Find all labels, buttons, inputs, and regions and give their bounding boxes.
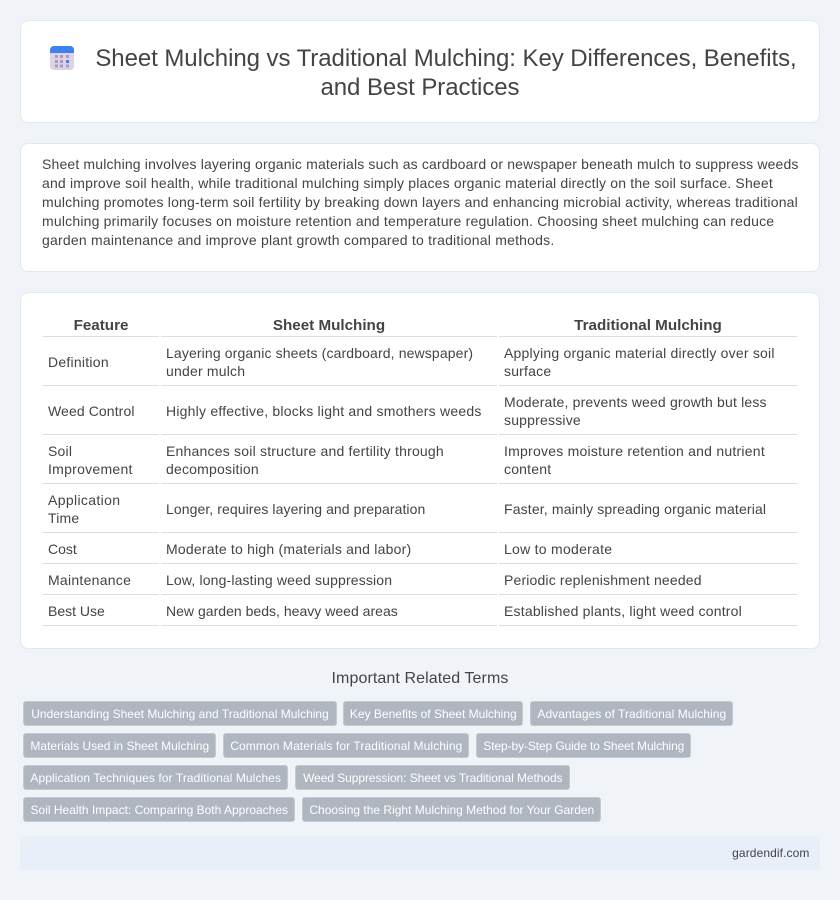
text block: intro: mulching primarily focuses on moisture retention and temperature regulation. Choosing sheet mulching can reduce xyxy=(42,213,774,229)
table: comparison: decomposition xyxy=(166,461,259,477)
text block: intro xyxy=(42,156,799,248)
table: comparison: Low to moderate xyxy=(504,541,612,557)
table: comparison xyxy=(43,317,797,626)
text block: intro: mulching promotes long-term soil fertility by breaking down layers and enhancing microbial activity, whereas traditional xyxy=(42,194,798,210)
related term chips: Common Materials for Traditional Mulching xyxy=(230,739,462,753)
panel: introduction xyxy=(20,143,820,272)
icon: calendar xyxy=(50,46,74,70)
table: comparison: Improvement xyxy=(48,461,133,477)
panel: comparison table xyxy=(20,292,820,649)
title xyxy=(95,45,797,101)
table: comparison: Time xyxy=(48,510,79,526)
heading: related terms: Important Related Terms xyxy=(332,670,508,687)
table: comparison: Moderate, prevents weed growth but less xyxy=(504,394,767,410)
table: comparison: content xyxy=(504,461,551,477)
related term chips: Advantages of Traditional Mulching xyxy=(537,707,726,721)
title: and Best Practices xyxy=(320,74,520,101)
title: Sheet Mulching vs Traditional Mulching: Key Differences, Benefits, xyxy=(95,45,797,72)
table: comparison: Enhances soil structure and fertility through xyxy=(166,443,444,459)
table: comparison: under mulch xyxy=(166,363,245,379)
related term chips: Step-by-Step Guide to Sheet Mulching xyxy=(483,739,684,753)
footer xyxy=(20,836,820,870)
table: comparison: Soil xyxy=(48,443,72,459)
table: comparison: Definition xyxy=(48,354,109,370)
panel: header xyxy=(20,20,820,123)
related term chips: Materials Used in Sheet Mulching xyxy=(30,739,209,753)
table: comparison: Maintenance xyxy=(48,572,131,588)
table: comparison: suppressive xyxy=(504,412,581,428)
table: comparison: Established plants, light weed control xyxy=(504,603,742,619)
related term chips: Soil Health Impact: Comparing Both Approaches xyxy=(31,803,288,817)
table: comparison: Feature xyxy=(74,317,128,334)
related term chips xyxy=(23,701,733,822)
table: comparison: Longer, requires layering and preparation xyxy=(166,501,425,517)
table: comparison: Periodic replenishment needed xyxy=(504,572,702,588)
table: comparison: Application xyxy=(48,492,120,508)
table: comparison: Moderate to high (materials and labor) xyxy=(166,541,411,557)
table: comparison: New garden beds, heavy weed areas xyxy=(166,603,398,619)
source credit: gardendif.com xyxy=(732,846,810,860)
table: comparison: Layering organic sheets (cardboard, newspaper) xyxy=(166,345,473,361)
table: comparison: Sheet Mulching xyxy=(273,317,385,334)
table: comparison: Faster, mainly spreading organic material xyxy=(504,501,766,517)
related term chips: Application Techniques for Traditional Mulches xyxy=(30,771,281,785)
related term chips: Weed Suppression: Sheet vs Traditional Methods xyxy=(303,771,562,785)
table: comparison: Highly effective, blocks light and smothers weeds xyxy=(166,403,482,419)
table: comparison: Low, long-lasting weed suppression xyxy=(166,572,392,588)
related term chips: Key Benefits of Sheet Mulching xyxy=(350,707,517,721)
table: comparison: Best Use xyxy=(48,603,105,619)
table: comparison: surface xyxy=(504,363,551,379)
table: comparison: Improves moisture retention and nutrient xyxy=(504,443,765,459)
table: comparison: Cost xyxy=(48,541,77,557)
table: comparison: Traditional Mulching xyxy=(574,317,722,334)
text block: intro: garden maintenance and improve plant growth compared to traditional methods. xyxy=(42,232,554,248)
related term chips: Choosing the Right Mulching Method for Your Garden xyxy=(309,803,594,817)
related term chips: Understanding Sheet Mulching and Traditional Mulching xyxy=(31,707,329,721)
text block: intro: and improve soil health, while traditional mulching simply places organic material directly on the soil surface. Sheet xyxy=(42,175,773,191)
text block: intro: Sheet mulching involves layering organic materials such as cardboard or newspaper beneath mulch to suppress weeds xyxy=(42,156,799,172)
table: comparison: Applying organic material directly over soil xyxy=(504,345,775,361)
table: comparison: Weed Control xyxy=(48,403,135,419)
